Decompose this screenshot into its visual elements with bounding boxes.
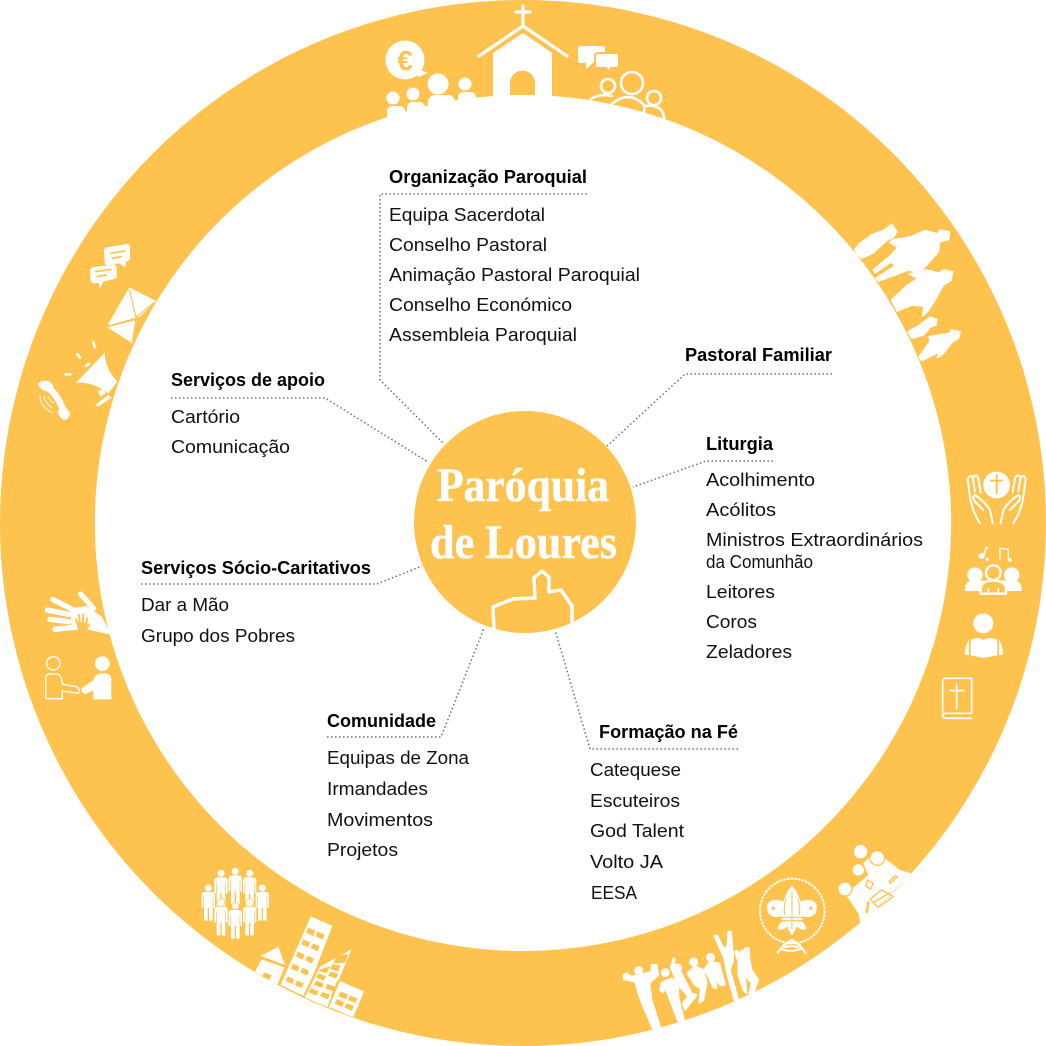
icon: telephone xyxy=(38,381,70,420)
text block: Liturgia: Coros xyxy=(706,611,757,632)
icon: euro speech bubble xyxy=(386,40,428,80)
connector lines xyxy=(141,194,832,749)
icon: crowd of people xyxy=(202,868,269,939)
text block: Liturgia: da Comunhão xyxy=(706,551,813,572)
icon: chat messages xyxy=(90,244,130,288)
icon group: top church and community xyxy=(386,6,664,128)
text block: Comunidade: Projetos xyxy=(327,839,398,860)
title xyxy=(430,459,617,569)
icon: praying hands with host xyxy=(968,472,1026,523)
icon: megaphone xyxy=(66,343,117,407)
text block: Liturgia: Liturgia xyxy=(706,434,774,454)
text block: Serviços Sócio-Caritativos: Dar a Mão xyxy=(141,594,229,615)
text block: Comunidade: Comunidade xyxy=(327,711,436,731)
icon: bible xyxy=(943,678,972,718)
text block: Pastoral Familiar: Pastoral Familiar xyxy=(685,345,832,365)
icon: church xyxy=(479,6,567,100)
text block: Serviços de apoio: Serviços de apoio xyxy=(171,370,325,390)
icon: reader with book xyxy=(965,613,1003,658)
text block: Formação na Fé: EESA xyxy=(591,882,638,903)
central circle xyxy=(414,411,636,633)
icon: outlined group xyxy=(591,72,664,118)
icon: helping hands xyxy=(47,594,112,635)
text block: Liturgia: Acolhimento xyxy=(706,469,815,490)
text block: Organização Paroquial: Animação Pastoral Paroquial xyxy=(389,264,640,285)
icon: scout emblem xyxy=(760,879,825,953)
icon: family walking xyxy=(855,224,960,361)
text block: Serviços Sócio-Caritativos xyxy=(141,558,371,646)
text block: Formação na Fé: Formação na Fé xyxy=(599,722,738,742)
text block: Serviços de apoio: Comunicação xyxy=(171,436,290,457)
text block: Serviços de apoio xyxy=(171,370,325,457)
text block: Organização Paroquial xyxy=(389,167,640,345)
text block: Comunidade: Irmandades xyxy=(327,778,428,799)
text block: Liturgia: Ministros Extraordinários xyxy=(706,529,923,550)
title: Paróquia xyxy=(437,459,609,512)
icon: handshake xyxy=(46,656,111,699)
icon: envelopes xyxy=(107,287,156,343)
text block: Organização Paroquial: Organização Paroquial xyxy=(389,167,587,187)
text block: Serviços de apoio: Cartório xyxy=(171,406,240,427)
text block: Liturgia: Acólitos xyxy=(706,499,776,520)
text block: Formação na Fé: Catequese xyxy=(590,759,681,780)
icon: students group work xyxy=(838,845,912,924)
text block: Organização Paroquial: Conselho Pastoral xyxy=(389,234,547,255)
icon: choir xyxy=(965,546,1022,594)
icon: church outline xyxy=(493,571,572,629)
icon: donors crowd xyxy=(386,74,476,128)
icon: city buildings xyxy=(255,916,364,1017)
text block: Formação na Fé: Escuteiros xyxy=(590,790,680,811)
text block: Liturgia xyxy=(706,434,923,662)
text block: Serviços Sócio-Caritativos: Grupo dos Pobres xyxy=(141,625,295,646)
text block: Organização Paroquial: Equipa Sacerdotal xyxy=(389,204,545,225)
text block: Organização Paroquial: Assembleia Paroquial xyxy=(389,324,577,345)
text block: Comunidade: Movimentos xyxy=(327,809,433,830)
text block: Serviços Sócio-Caritativos: Serviços Sócio-Caritativos xyxy=(141,558,371,578)
text block: Organização Paroquial: Conselho Económico xyxy=(389,294,572,315)
title: de Loures xyxy=(430,516,617,569)
text block: Liturgia: Zeladores xyxy=(706,641,792,662)
text block: Formação na Fé xyxy=(590,722,738,903)
text block: Liturgia: Leitores xyxy=(706,581,775,602)
text block: Formação na Fé: God Talent xyxy=(590,820,685,841)
icon: euro speech bubble: € xyxy=(397,45,413,76)
text block: Comunidade: Equipas de Zona xyxy=(327,747,470,768)
icon: jumping youth xyxy=(623,932,758,1030)
icon: chat bubbles xyxy=(578,46,619,72)
text block: Comunidade xyxy=(327,711,470,860)
text block: Formação na Fé: Volto JA xyxy=(590,851,664,872)
